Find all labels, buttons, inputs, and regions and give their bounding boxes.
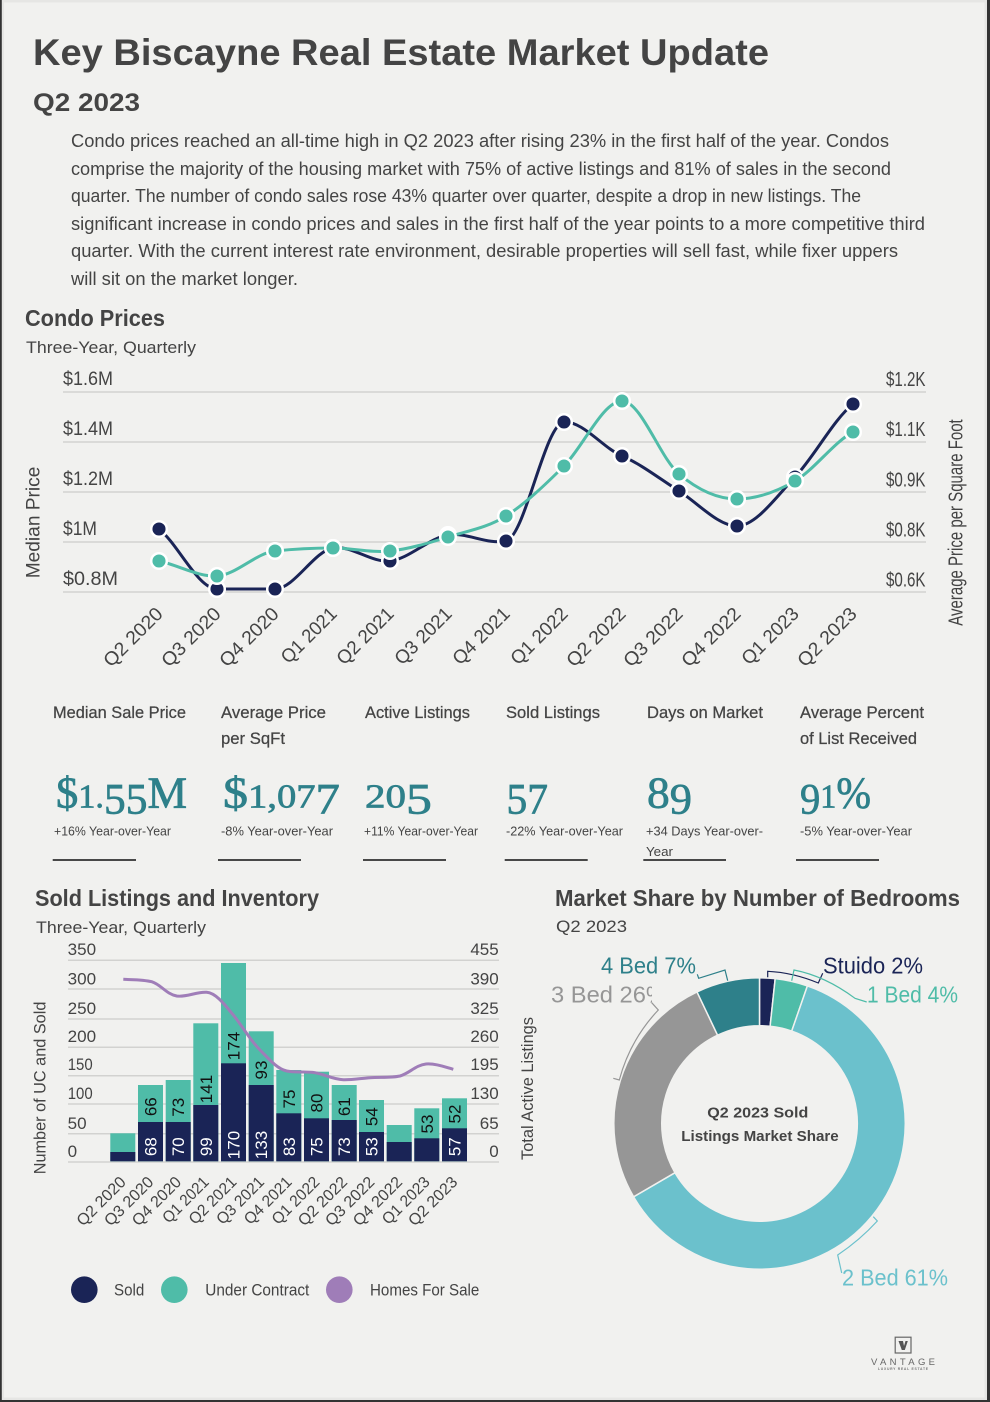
sold bar values: 73 bbox=[335, 1137, 354, 1156]
donut center label bbox=[681, 1106, 839, 1145]
quarter axis labels: Q1 2021 bbox=[277, 604, 342, 668]
stat: days on market: +34 Days Year-over- bbox=[646, 824, 763, 839]
left axis labels: $0.8M bbox=[63, 569, 118, 590]
stat: average price per square foot bbox=[218, 703, 340, 860]
sold bar values: 75 bbox=[308, 1137, 326, 1156]
sold bar values: 83 bbox=[280, 1137, 299, 1156]
quarter axis labels: Q2 2021 bbox=[333, 604, 399, 669]
quarter axis labels bbox=[100, 604, 862, 672]
bar chart left axis labels: 150 bbox=[68, 1055, 93, 1074]
stat: days on market bbox=[643, 703, 763, 860]
stat: days on market: Year bbox=[646, 844, 674, 859]
sold bar values: 53 bbox=[362, 1137, 382, 1156]
under contract bar values: 174 bbox=[224, 1032, 244, 1060]
quarter axis labels: Q1 2023 bbox=[738, 604, 804, 669]
under contract bar values: 54 bbox=[362, 1107, 382, 1126]
under contract bar values: 61 bbox=[335, 1097, 354, 1116]
subheading: market share: Q2 2023 bbox=[556, 917, 627, 936]
quarter axis labels: Q2 2020 bbox=[100, 604, 168, 672]
label: 4 bed: 4 Bed 7% bbox=[601, 952, 696, 978]
bar chart right axis labels: 325 bbox=[470, 999, 499, 1018]
homes for sale line bbox=[123, 979, 453, 1080]
summary paragraph: significant increase in condo prices and sales in the first half of the year points to a more competitive third bbox=[71, 214, 925, 234]
under contract bars bbox=[110, 963, 467, 1161]
sold bar values: 70 bbox=[169, 1137, 188, 1156]
stat: average price per square foot: $1,07 bbox=[223, 769, 307, 818]
quarter axis labels: Q3 2020 bbox=[158, 604, 226, 672]
bar chart quarter labels: Q3 2022 bbox=[322, 1174, 378, 1230]
panel: sold listings and inventory bbox=[31, 885, 537, 1303]
stat: sold listings: -22% Year-over-Year bbox=[506, 824, 624, 839]
under contract bar values: 93 bbox=[252, 1061, 271, 1079]
legend bbox=[71, 1276, 479, 1303]
bar chart quarter labels: Q3 2021 bbox=[214, 1174, 268, 1228]
stat: days on market: 8 bbox=[647, 769, 670, 818]
quarter axis labels: Q4 2022 bbox=[678, 604, 746, 672]
left axis labels: $1.2M bbox=[63, 469, 113, 490]
bar chart grid lines bbox=[68, 960, 499, 1162]
stat: average percent of list received: 1 bbox=[820, 779, 836, 816]
panel: key statistics bbox=[53, 703, 924, 860]
bar chart left axis title: Number of UC and Sold bbox=[31, 1002, 50, 1174]
bar chart left axis labels: 200 bbox=[68, 1027, 96, 1046]
leader lines bbox=[613, 970, 877, 1273]
left axis labels: $1.6M bbox=[63, 369, 113, 390]
sold bar values: 99 bbox=[197, 1137, 216, 1156]
bar chart quarter labels: Q1 2021 bbox=[160, 1174, 213, 1227]
stat: average price per square foot: 7 bbox=[316, 777, 340, 824]
subheading: condo prices: Three-Year, Quarterly bbox=[26, 338, 197, 357]
right axis title: Average Price per Square Foot bbox=[946, 419, 968, 626]
bar chart left axis labels: 50 bbox=[68, 1114, 87, 1133]
stat: active listings: +11% Year-over-Year bbox=[364, 824, 479, 839]
stat: sold listings: Sold Listings bbox=[506, 703, 600, 722]
quarter axis labels: Q3 2022 bbox=[620, 604, 688, 672]
stat: active listings: Active Listings bbox=[365, 703, 470, 722]
bar chart left axis labels: 250 bbox=[68, 999, 96, 1018]
stat: median sale price bbox=[53, 703, 187, 860]
summary paragraph: quarter. With the current interest rate environment, desirable properties will sell fast, while fixer uppers bbox=[71, 241, 898, 261]
heading: market share: Market Share by Number of Bedrooms bbox=[555, 885, 960, 911]
bar chart left axis labels: 0 bbox=[68, 1142, 77, 1161]
stat: average percent of list received: % bbox=[836, 769, 871, 818]
stat: sold listings: 57 bbox=[506, 777, 548, 824]
bar chart right axis labels bbox=[470, 940, 499, 1161]
stat: median sale price: Median Sale Price bbox=[53, 703, 186, 722]
panel: condo prices bbox=[24, 305, 968, 672]
stat: median sale price: $1. bbox=[56, 769, 104, 818]
under contract bar values: 73 bbox=[169, 1098, 188, 1117]
price per square foot markers bbox=[151, 393, 861, 584]
bar chart left axis labels bbox=[68, 940, 96, 1161]
under contract bar values: 80 bbox=[308, 1094, 326, 1112]
legend: Homes For Sale bbox=[370, 1280, 479, 1299]
donut center label: Q2 2023 Sold bbox=[707, 1106, 808, 1122]
stat: active listings bbox=[363, 703, 479, 860]
bar chart quarter labels: Q2 2022 bbox=[295, 1174, 351, 1230]
sold bar values: 57 bbox=[446, 1137, 464, 1156]
right axis labels: $0.8K bbox=[886, 520, 926, 542]
bar chart quarter labels: Q4 2021 bbox=[241, 1174, 296, 1228]
chart grid lines bbox=[63, 392, 926, 592]
under contract bar values: 75 bbox=[280, 1090, 299, 1108]
title: Key Biscayne Real Estate Market Update bbox=[33, 31, 769, 73]
sold bar values bbox=[142, 1131, 464, 1159]
stat: median sale price: +16% Year-over-Year bbox=[54, 824, 172, 839]
price per square foot line bbox=[159, 401, 853, 576]
bar chart right axis labels: 260 bbox=[470, 1027, 499, 1046]
under contract bar values: 141 bbox=[197, 1075, 216, 1103]
label: 3 bed: 3 Bed 26% bbox=[551, 982, 667, 1008]
donut center label: Listings Market Share bbox=[681, 1129, 839, 1145]
legend: Sold bbox=[114, 1280, 144, 1299]
sold bar values: 170 bbox=[224, 1131, 244, 1159]
sold bar values: 133 bbox=[252, 1131, 271, 1159]
heading: sold listings and inventory: Sold Listings and Inventory bbox=[35, 885, 319, 911]
left axis labels bbox=[63, 369, 118, 590]
logo: vantage: LUXURY REAL ESTATE bbox=[878, 1367, 929, 1371]
right axis labels: $1.2K bbox=[886, 369, 926, 391]
bar chart quarter labels: Q1 2023 bbox=[379, 1174, 434, 1228]
bar chart left axis labels: 100 bbox=[68, 1084, 93, 1103]
stat: average price per square foot: -8% Year-over-Year bbox=[221, 824, 334, 839]
under contract bar values: 52 bbox=[446, 1105, 464, 1123]
right axis labels bbox=[886, 369, 926, 592]
stat: active listings: 5 bbox=[406, 777, 432, 824]
bar chart right axis labels: 65 bbox=[480, 1114, 499, 1133]
summary paragraph bbox=[70, 131, 925, 289]
logo: vantage bbox=[871, 1337, 935, 1371]
stat: average percent of list received: 9 bbox=[800, 777, 820, 824]
bar chart right axis labels: 0 bbox=[489, 1142, 499, 1161]
quarter axis labels: Q1 2022 bbox=[507, 604, 573, 669]
heading: condo prices: Condo Prices bbox=[25, 305, 165, 331]
bar chart quarter labels: Q2 2021 bbox=[186, 1174, 240, 1228]
bar chart quarter labels bbox=[74, 1174, 461, 1230]
label: 1 bed: 1 Bed 4% bbox=[867, 982, 958, 1008]
bar chart quarter labels: Q2 2023 bbox=[405, 1174, 461, 1230]
subtitle: Q2 2023 bbox=[33, 89, 140, 117]
bar chart right axis labels: 455 bbox=[470, 940, 499, 959]
right axis labels: $1.1K bbox=[886, 419, 926, 441]
quarter axis labels: Q4 2020 bbox=[216, 604, 284, 672]
stat: average percent of list received: -5% Year-over-Year bbox=[800, 824, 913, 839]
bar chart left axis labels: 350 bbox=[68, 940, 96, 959]
sold bars bbox=[110, 1063, 467, 1161]
under contract bar values bbox=[142, 1032, 464, 1133]
label: 2 bed: 2 Bed 61% bbox=[842, 1265, 948, 1291]
stat: average percent of list received bbox=[796, 703, 924, 860]
bar chart right axis labels: 390 bbox=[470, 969, 499, 988]
left axis labels: $1M bbox=[63, 519, 97, 540]
bar chart quarter labels: Q2 2020 bbox=[74, 1174, 130, 1230]
bar chart quarter labels: Q4 2020 bbox=[129, 1174, 185, 1230]
summary paragraph: will sit on the market longer. bbox=[70, 269, 298, 289]
bar chart left axis labels: 300 bbox=[68, 969, 96, 988]
right axis labels: $0.6K bbox=[886, 570, 926, 592]
summary paragraph: comprise the majority of the housing market with 75% of active listings and 81% of sales in the second bbox=[71, 159, 891, 179]
stat: days on market: 9 bbox=[670, 777, 692, 824]
stat: median sale price: 55 bbox=[104, 777, 147, 824]
sold bar values: 68 bbox=[142, 1137, 160, 1156]
quarter axis labels: Q2 2023 bbox=[794, 604, 862, 672]
median price markers bbox=[151, 396, 861, 597]
legend: Under Contract bbox=[205, 1280, 310, 1299]
stat: days on market: Days on Market bbox=[647, 703, 763, 722]
label: studio: Stuido 2% bbox=[823, 952, 923, 978]
quarter axis labels: Q2 2022 bbox=[563, 604, 631, 672]
left axis labels: $1.4M bbox=[63, 419, 113, 440]
logo: vantage: VANTAGE bbox=[871, 1357, 935, 1368]
bar chart quarter labels: Q1 2022 bbox=[269, 1174, 323, 1228]
summary paragraph: quarter. The number of condo sales rose 43% quarter over quarter, despite a drop in new listings. The bbox=[71, 186, 861, 206]
bar chart right axis labels: 130 bbox=[470, 1084, 499, 1103]
median price line bbox=[159, 404, 853, 589]
quarter axis labels: Q3 2021 bbox=[391, 604, 457, 669]
under contract bar values: 53 bbox=[418, 1115, 437, 1133]
bar chart right axis title: Total Active Listings bbox=[518, 1017, 537, 1160]
subheading: sold listings: Three-Year, Quarterly bbox=[36, 918, 207, 937]
under contract bar values: 66 bbox=[142, 1097, 160, 1116]
stat: average percent of list received: Average Percent bbox=[800, 703, 924, 722]
stat: median sale price: M bbox=[147, 769, 187, 818]
summary paragraph: Condo prices reached an all-time high in Q2 2023 after rising 23% in the first half of the year. Condos bbox=[71, 131, 889, 151]
donut chart bbox=[614, 978, 905, 1269]
stat: average price per square foot: Average Price bbox=[221, 703, 326, 722]
bar chart quarter labels: Q3 2020 bbox=[101, 1174, 157, 1230]
bar chart quarter labels: Q4 2022 bbox=[350, 1174, 406, 1230]
quarter axis labels: Q4 2021 bbox=[449, 604, 515, 669]
right axis labels: $0.9K bbox=[886, 470, 926, 492]
stat: sold listings bbox=[505, 703, 624, 860]
bar chart right axis labels: 195 bbox=[470, 1055, 499, 1074]
stat: average price per square foot: per SqFt bbox=[221, 729, 285, 748]
left axis title: Median Price bbox=[24, 467, 44, 578]
stat: active listings: 20 bbox=[365, 779, 406, 816]
stat: average percent of list received: of List Received bbox=[800, 729, 917, 748]
panel: market share by bedrooms bbox=[551, 885, 960, 1291]
